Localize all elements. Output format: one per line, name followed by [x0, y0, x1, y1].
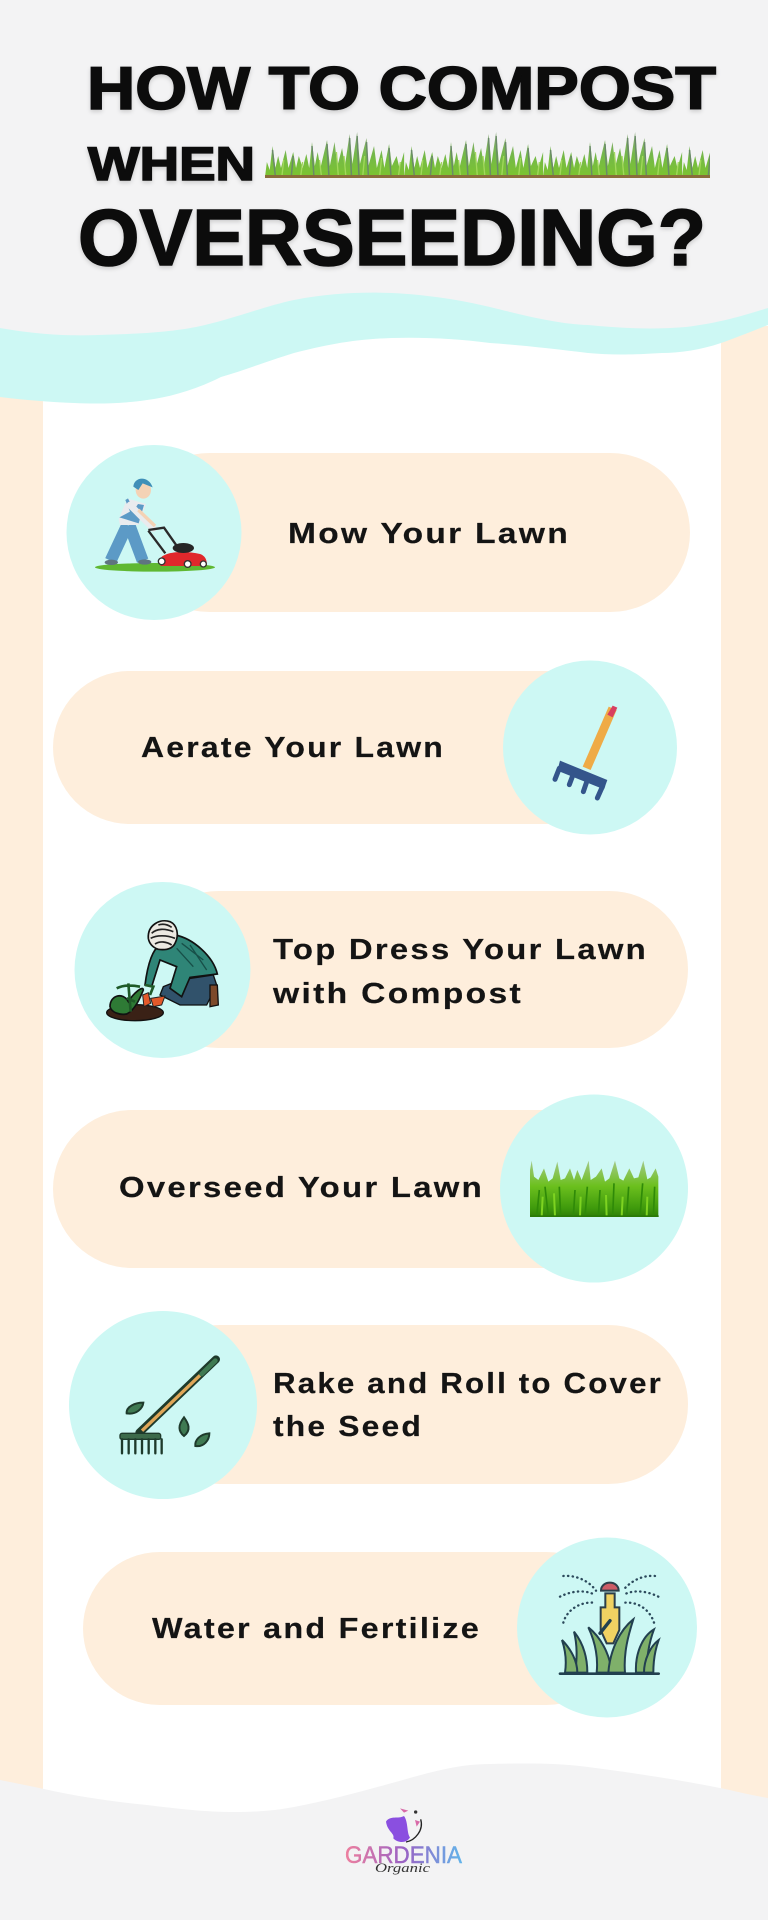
label: Rake and Roll to Cover [273, 1368, 663, 1400]
right peach column [721, 326, 768, 1830]
title line: when: WHEN [88, 137, 255, 190]
left peach column [0, 390, 43, 1830]
label: Overseed Your Lawn [119, 1172, 484, 1204]
label: Water and Fertilize [152, 1613, 481, 1645]
icon: person mowing [95, 479, 215, 572]
circle [500, 1094, 688, 1282]
pill [140, 1325, 688, 1484]
logo wordmark: GARDENIA [345, 1842, 462, 1869]
pill [83, 1552, 623, 1705]
icon: rake [555, 706, 617, 798]
label: Mow Your Lawn [288, 518, 570, 550]
title line: how to compost: HOW TO COMPOST [87, 55, 716, 122]
step 1: mow your lawn [66, 445, 690, 620]
bottom grey wave [0, 1763, 768, 1920]
step 6: water and fertilize [83, 1538, 697, 1718]
step 3: top dress your lawn with compost [74, 882, 688, 1058]
pill [140, 891, 688, 1048]
icon: grass [530, 1161, 659, 1217]
top teal wave [0, 293, 768, 404]
label: the Seed [273, 1411, 423, 1443]
label [273, 1368, 663, 1443]
circle [69, 1311, 257, 1499]
logo script: Organic [375, 1860, 430, 1875]
circle [517, 1538, 697, 1718]
icon: sprinkler in grass [560, 1576, 659, 1674]
title line: overseeding: OVERSEEDING? [78, 193, 706, 282]
title grass strip [265, 132, 710, 178]
step 2: aerate your lawn [53, 660, 677, 834]
white content area [0, 315, 768, 1830]
circle [74, 882, 250, 1058]
label [272, 934, 648, 1010]
label: Top Dress Your Lawn [273, 934, 648, 966]
icon: gardener with compost [107, 921, 218, 1021]
title [78, 66, 718, 270]
pill [130, 453, 690, 612]
pill [53, 1110, 623, 1268]
label: with Compost [272, 978, 523, 1010]
label: Aerate Your Lawn [141, 732, 445, 764]
step 5: rake and roll to cover the seed [69, 1311, 688, 1499]
step 4: overseed your lawn [53, 1094, 688, 1282]
logo: gardenia organic [345, 1808, 462, 1875]
circle [66, 445, 242, 620]
circle [503, 660, 677, 834]
icon: rake with leaves [120, 1359, 216, 1453]
logo flower [386, 1808, 421, 1842]
pill [53, 671, 623, 824]
